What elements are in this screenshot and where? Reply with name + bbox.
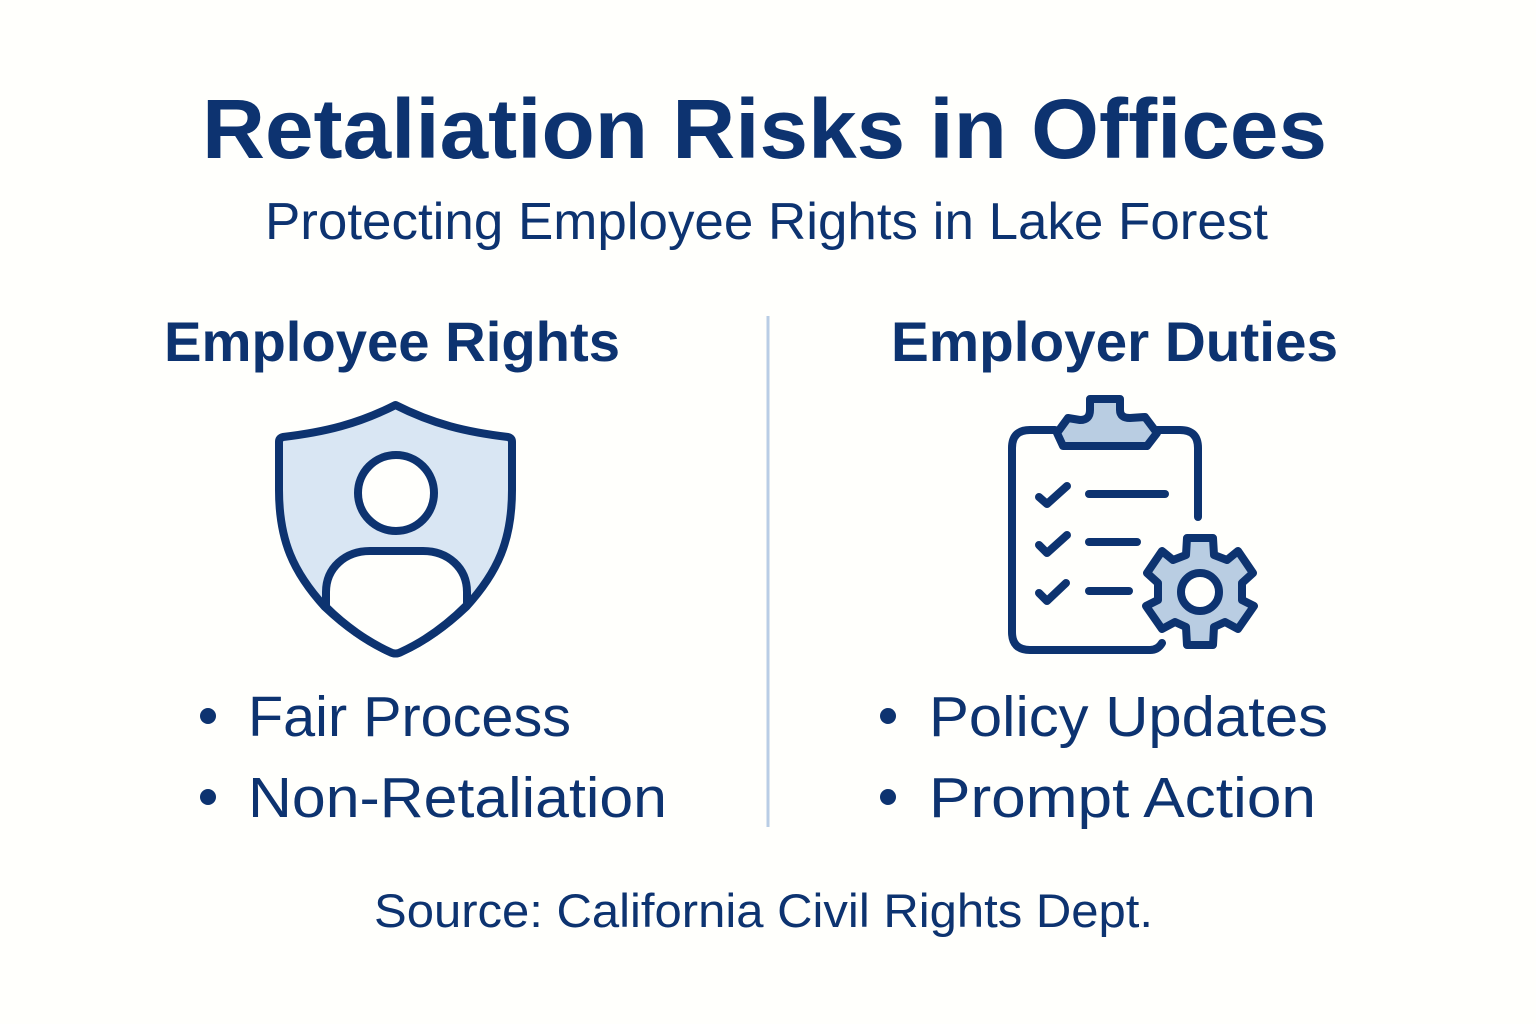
subtitle: Protecting Employee Rights in Lake Forest <box>265 193 1269 251</box>
icon: shield with person <box>279 405 512 654</box>
list: employee rights: Non-Retaliation <box>248 766 667 830</box>
icon: clipboard with gear <box>1012 399 1254 650</box>
list: employee rights: Fair Process <box>248 685 571 749</box>
heading: employee rights: Employee Rights <box>164 310 620 373</box>
list: employee rights <box>200 685 667 830</box>
list: employer duties: Policy Updates <box>929 685 1328 749</box>
heading: employer duties: Employer Duties <box>891 310 1338 373</box>
list: employer duties: Prompt Action <box>929 766 1316 830</box>
panel: employee rights <box>164 310 667 830</box>
list: employer duties <box>880 685 1328 830</box>
title: Retaliation Risks in Offices <box>202 82 1327 176</box>
panel: employer duties <box>880 310 1338 830</box>
source note: Source: California Civil Rights Dept. <box>374 884 1153 937</box>
